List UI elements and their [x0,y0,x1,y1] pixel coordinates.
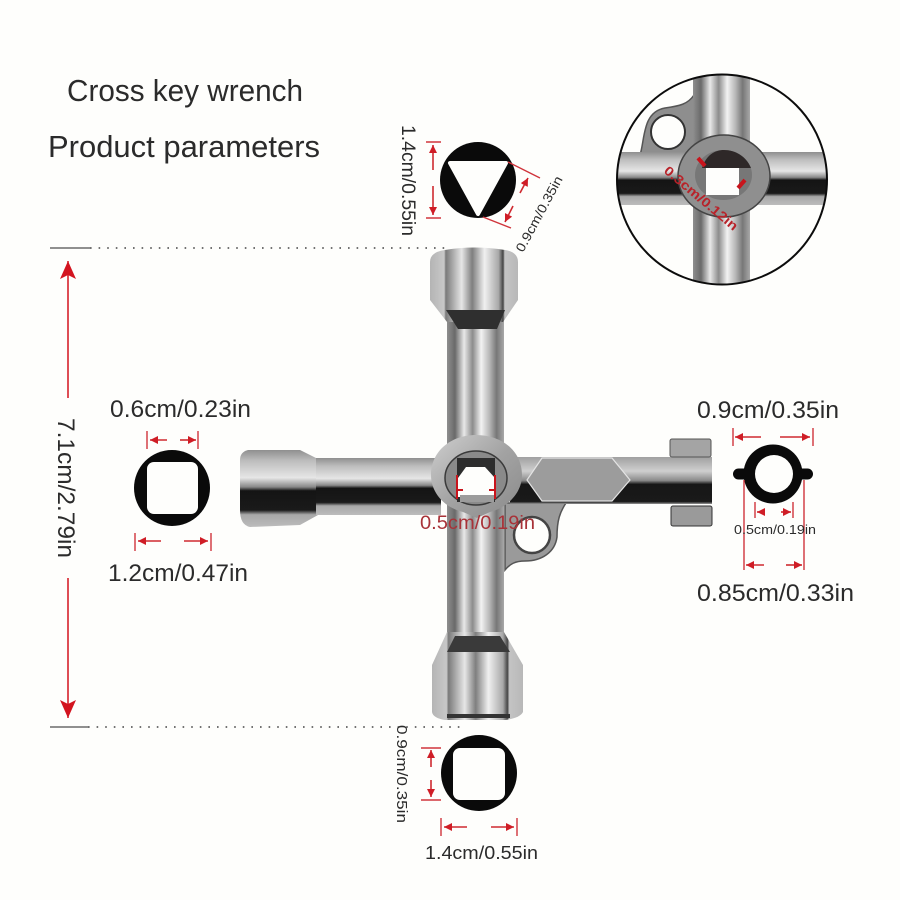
inset: socket hole [695,150,752,200]
ring socket dimensions: 0.85cm/0.33in [697,580,854,607]
triangle dimensions: 1.4cm/0.55in [397,125,418,236]
left square socket profile [134,450,210,526]
wrench: left socket [240,450,318,527]
inset: red dimension mark [661,158,745,233]
left square dimensions: 1.2cm/0.47in [108,560,248,587]
center hole dimension 0.5cm/0.19in: 0.5cm/0.19in [420,513,535,534]
title: Cross key wrench [67,73,303,108]
left square dimensions: 0.6cm/0.23in [110,396,251,423]
bottom square dimensions [393,725,538,863]
wrench: right shaft [510,457,712,504]
wrench: vertical shaft [447,315,504,660]
left square dimensions [108,396,251,587]
wrench: center ring [431,435,522,518]
title: Product parameters [48,129,320,164]
center hole dimension 0.5cm/0.19in [420,475,535,534]
cross key wrench [240,248,712,720]
inset: horizontal shaft [612,152,832,205]
bottom square socket profile [441,735,517,811]
inset: vertical shaft [693,70,750,290]
ring socket dimensions [697,397,854,607]
inset: square opening [706,168,739,195]
title [48,73,320,164]
inset: ring [678,135,770,217]
wrench: top socket [430,248,518,329]
ring socket dimensions: 0.5cm/0.19in [734,522,816,537]
triangle dimensions: 0.9cm/0.35in [512,173,566,254]
wrench: left shaft [316,458,441,515]
wrench: hex plate [527,458,630,501]
wrench: loop [505,503,566,570]
wrench: right tabs [670,439,712,526]
bottom square dimensions: 0.9cm/0.35in [393,725,410,823]
triangle socket profile [440,142,516,218]
bottom square dimensions: 1.4cm/0.55in [425,843,538,863]
inset: loop [640,95,694,155]
inset: detail circle [612,70,832,290]
ring socket profile [733,444,813,504]
wrench: bottom socket [432,632,523,720]
overall height dimension 7.1cm/2.79in: 7.1cm/2.79in [52,418,79,558]
inset: red dimension mark: 0.3cm/0.12in [661,163,741,233]
triangle dimensions [397,125,566,254]
ring socket dimensions: 0.9cm/0.35in [697,397,839,424]
